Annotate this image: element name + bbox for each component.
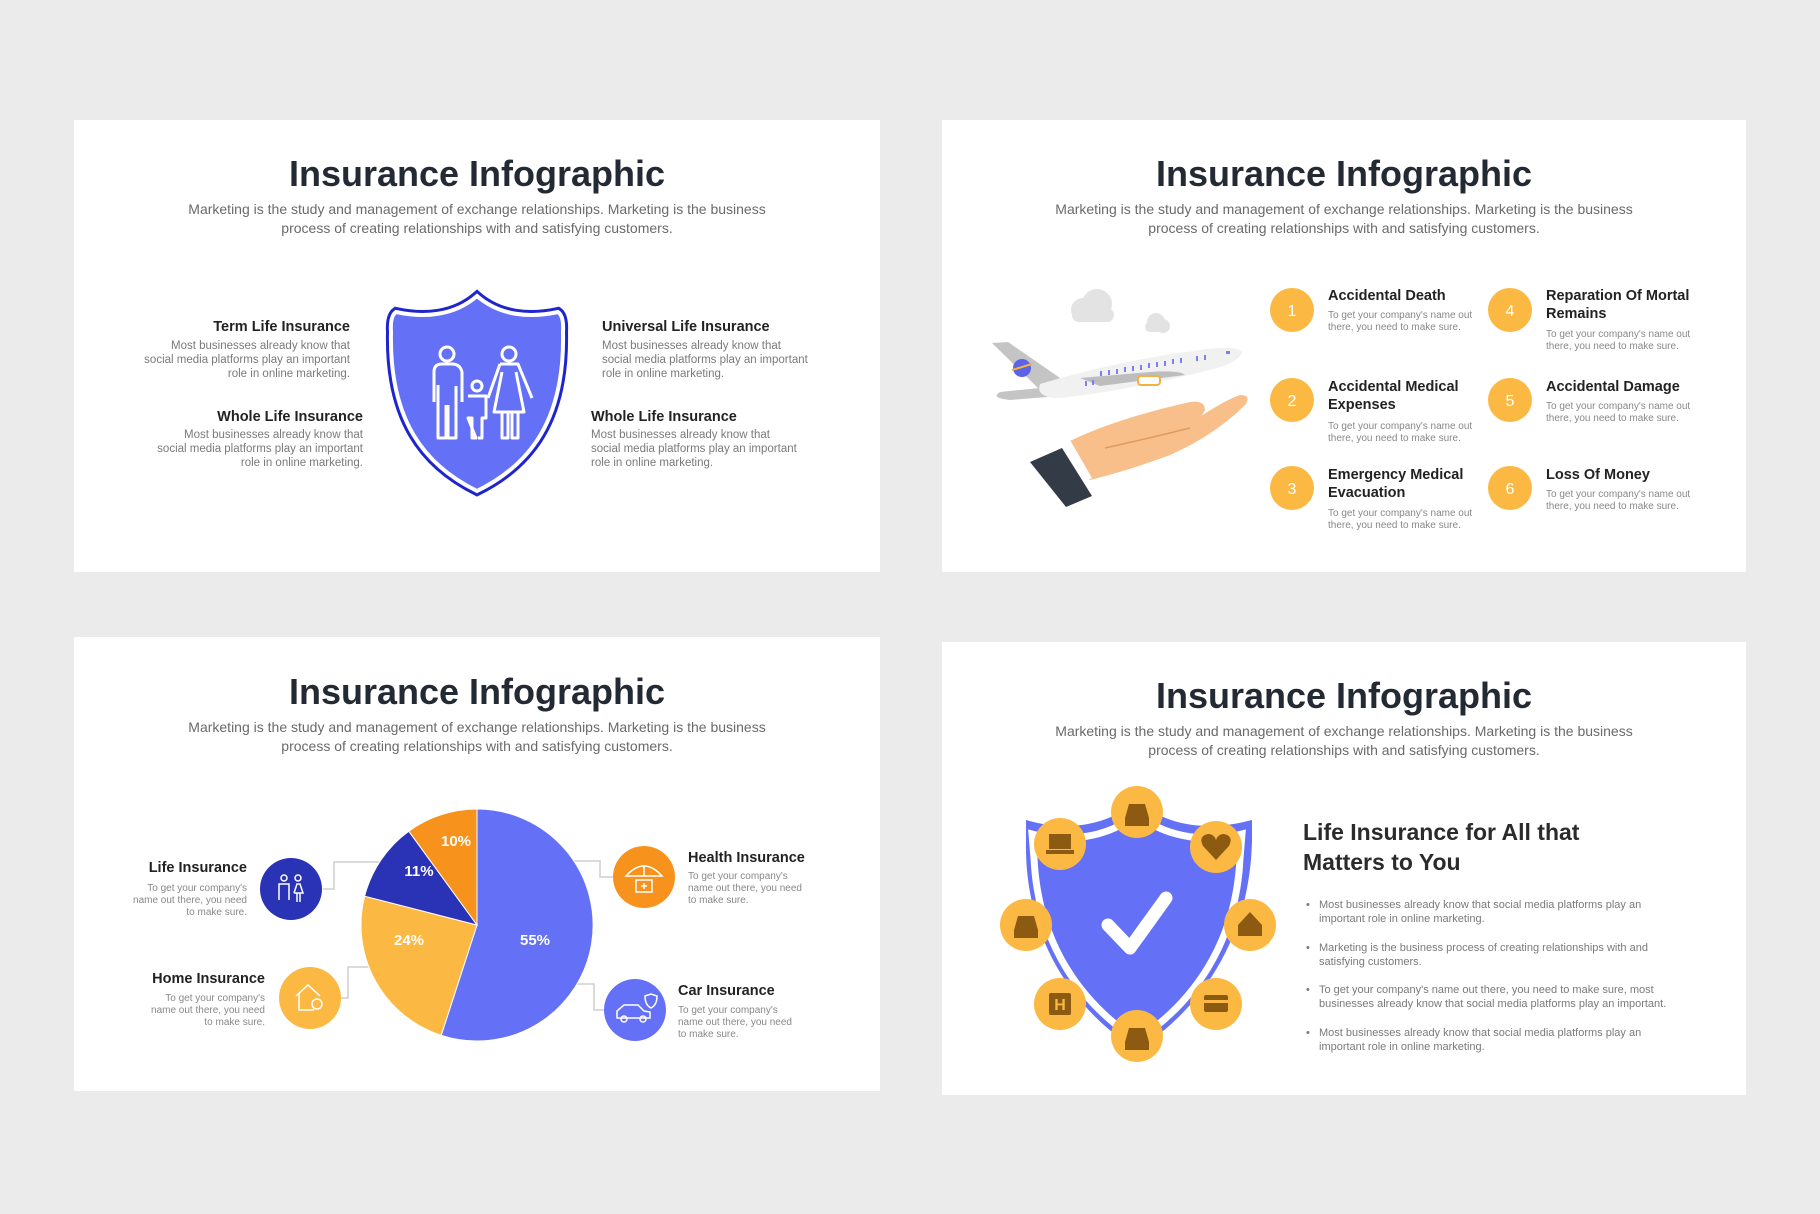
- subtitle: process of creating relationships with and satisfying customers.: [1148, 220, 1540, 236]
- item 4: 4: [1506, 303, 1515, 320]
- icon: car: [604, 979, 666, 1041]
- text: car insurance: to make sure.: [678, 1029, 739, 1040]
- text: life insurance: [133, 860, 247, 918]
- item 1: Accidental Death: [1328, 288, 1446, 304]
- text: whole life left: role in online marketing.: [241, 457, 363, 469]
- item 4: Reparation Of Mortal: [1546, 288, 1689, 304]
- text: home insurance: [151, 971, 265, 1028]
- item 1: 1: [1288, 303, 1297, 320]
- text: whole life right: Most businesses already know that: [591, 429, 771, 441]
- item 5: [1488, 378, 1690, 424]
- text: health insurance: name out there, you need: [688, 883, 802, 894]
- bullet list: Marketing is the business process of creating relationships with and: [1319, 942, 1648, 954]
- pie chart: 10%: [441, 833, 471, 850]
- text: term life: Most businesses already know that: [171, 340, 351, 352]
- text: car insurance: name out there, you need: [678, 1017, 792, 1028]
- title: Insurance Infographic: [289, 153, 665, 194]
- item 2: [1270, 378, 1472, 444]
- bullet list: businesses already know that social media platforms play an important.: [1319, 998, 1666, 1010]
- icon: home: [279, 967, 341, 1029]
- bullet list: satisfying customers.: [1319, 956, 1422, 968]
- item 3: Evacuation: [1328, 485, 1405, 501]
- bullet list: To get your company's name out there, you need to make sure, most: [1319, 984, 1654, 996]
- item 2: To get your company's name out: [1328, 421, 1472, 432]
- item 2: Expenses: [1328, 397, 1396, 413]
- text: life insurance: to make sure.: [186, 907, 247, 918]
- bullet list: [1306, 899, 1666, 1053]
- text: home insurance: to make sure.: [204, 1017, 265, 1028]
- bullet list: Most businesses already know that social media platforms play an: [1319, 899, 1641, 911]
- item 3: Emergency Medical: [1328, 467, 1463, 483]
- panel: travel insurance list: [942, 120, 1746, 572]
- text: health insurance: Health Insurance: [688, 850, 805, 866]
- text: whole life right: role in online marketing.: [591, 457, 713, 469]
- item 1: there, you need to make sure.: [1328, 322, 1461, 333]
- text: car insurance: Car Insurance: [678, 983, 775, 999]
- icon: shield with family: [391, 296, 563, 491]
- text: term life: Term Life Insurance: [213, 319, 350, 335]
- item 5: To get your company's name out: [1546, 401, 1690, 412]
- text: home insurance: To get your company's: [165, 993, 265, 1004]
- icon: health: [613, 846, 675, 908]
- heading: Matters to You: [1303, 849, 1461, 875]
- text: whole life left: [157, 409, 364, 469]
- icon: shield with check and ring of icons: H: [1054, 997, 1066, 1014]
- subtitle: process of creating relationships with and satisfying customers.: [1148, 742, 1540, 758]
- illustration: plane on hand: [992, 289, 1248, 507]
- bullet list: •: [1306, 1027, 1310, 1039]
- item 6: 6: [1506, 481, 1515, 498]
- item 5: Accidental Damage: [1546, 379, 1680, 395]
- item 1: [1270, 288, 1472, 333]
- text: health insurance: to make sure.: [688, 895, 749, 906]
- text: universal life: social media platforms play an important: [602, 354, 809, 366]
- item 6: To get your company's name out: [1546, 489, 1690, 500]
- text: whole life left: Whole Life Insurance: [217, 409, 363, 425]
- item 4: [1488, 288, 1690, 352]
- subtitle: process of creating relationships with and satisfying customers.: [281, 220, 673, 236]
- item 2: there, you need to make sure.: [1328, 433, 1461, 444]
- icon: shield with check and ring of icons: [1000, 786, 1276, 1062]
- bullet list: •: [1306, 942, 1310, 954]
- pie chart: [361, 809, 593, 1041]
- text: home insurance: name out there, you need: [151, 1005, 265, 1016]
- subtitle: Marketing is the study and management of exchange relationships. Marketing is the business: [188, 719, 766, 735]
- icon: life: [260, 858, 322, 920]
- subtitle: Marketing is the study and management of exchange relationships. Marketing is the business: [188, 201, 766, 217]
- text: universal life: Most businesses already know that: [602, 340, 782, 352]
- bullet list: important role in online marketing.: [1319, 1041, 1485, 1053]
- subtitle: Marketing is the study and management of exchange relationships. Marketing is the business: [1055, 723, 1633, 739]
- text: universal life: [602, 319, 809, 380]
- item 4: To get your company's name out: [1546, 329, 1690, 340]
- text: term life: [144, 319, 351, 380]
- subtitle: process of creating relationships with and satisfying customers.: [281, 738, 673, 754]
- text: whole life left: social media platforms play an important: [157, 443, 364, 455]
- text: life insurance: name out there, you need: [133, 895, 247, 906]
- connectors: [323, 861, 615, 1010]
- pie chart: 11%: [404, 863, 434, 880]
- text: car insurance: [678, 983, 792, 1040]
- text: universal life: role in online marketing.: [602, 368, 724, 380]
- bullet list: important role in online marketing.: [1319, 913, 1485, 925]
- item 6: there, you need to make sure.: [1546, 501, 1679, 512]
- text: health insurance: To get your company's: [688, 871, 788, 882]
- text: life insurance: To get your company's: [147, 883, 247, 894]
- text: health insurance: [688, 850, 805, 906]
- heading: [1303, 819, 1580, 875]
- bullet list: Most businesses already know that social media platforms play an: [1319, 1027, 1641, 1039]
- bullet list: •: [1306, 984, 1310, 996]
- item 4: Remains: [1546, 306, 1606, 322]
- text: life insurance: Life Insurance: [149, 860, 247, 876]
- item 3: 3: [1288, 481, 1297, 498]
- text: whole life right: social media platforms play an important: [591, 443, 798, 455]
- text: whole life right: [591, 409, 798, 469]
- bullet list: •: [1306, 899, 1310, 911]
- panel: shield family: [74, 120, 880, 572]
- text: whole life left: Most businesses already know that: [184, 429, 364, 441]
- item 5: 5: [1506, 393, 1515, 410]
- item 3: [1270, 466, 1472, 531]
- item 4: there, you need to make sure.: [1546, 341, 1679, 352]
- title: Insurance Infographic: [1156, 675, 1532, 716]
- pie chart: 55%: [520, 932, 550, 949]
- item 1: To get your company's name out: [1328, 310, 1472, 321]
- pie chart: 24%: [394, 932, 424, 949]
- text: universal life: Universal Life Insurance: [602, 319, 770, 335]
- item 5: there, you need to make sure.: [1546, 413, 1679, 424]
- text: home insurance: Home Insurance: [152, 971, 265, 987]
- panel: pie chart: [74, 637, 880, 1091]
- subtitle: Marketing is the study and management of exchange relationships. Marketing is the business: [1055, 201, 1633, 217]
- item 3: there, you need to make sure.: [1328, 520, 1461, 531]
- text: term life: social media platforms play an important: [144, 354, 351, 366]
- panel: shield with icons: [942, 642, 1746, 1095]
- item 2: 2: [1288, 393, 1297, 410]
- item 2: Accidental Medical: [1328, 379, 1459, 395]
- text: term life: role in online marketing.: [228, 368, 350, 380]
- heading: Life Insurance for All that: [1303, 819, 1580, 845]
- title: Insurance Infographic: [289, 671, 665, 712]
- text: car insurance: To get your company's: [678, 1005, 778, 1016]
- item 6: Loss Of Money: [1546, 467, 1650, 483]
- text: whole life right: Whole Life Insurance: [591, 409, 737, 425]
- item 3: To get your company's name out: [1328, 508, 1472, 519]
- title: Insurance Infographic: [1156, 153, 1532, 194]
- item 6: [1488, 466, 1690, 512]
